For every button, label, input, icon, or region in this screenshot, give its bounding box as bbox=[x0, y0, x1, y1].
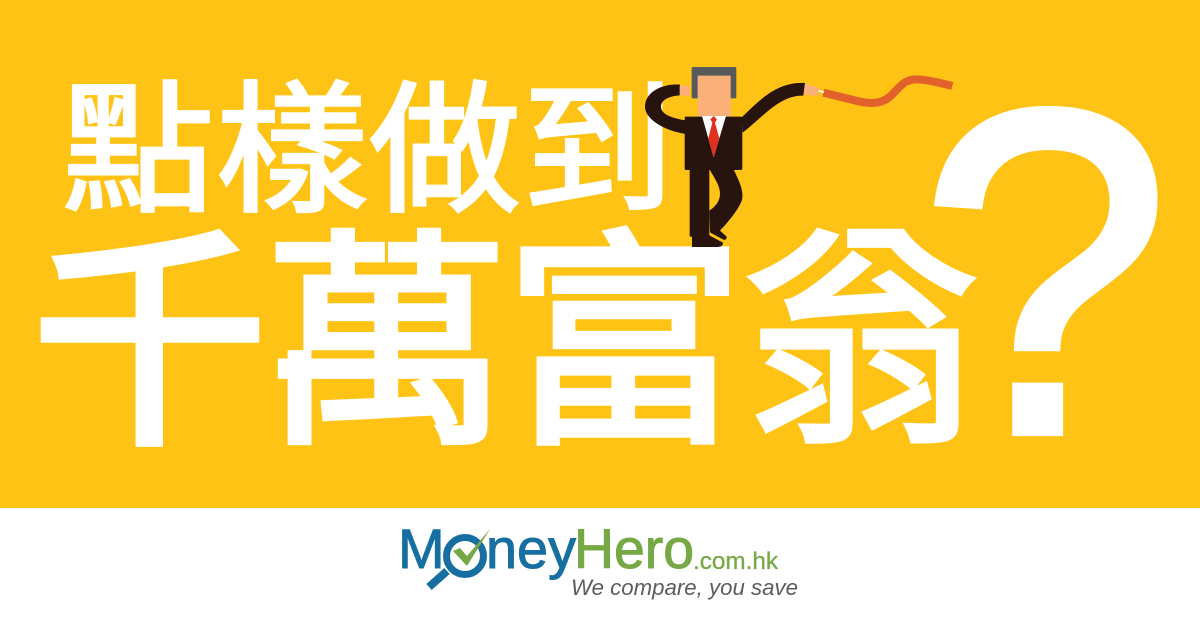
tie bbox=[708, 116, 719, 157]
bent leg bbox=[709, 170, 742, 240]
headline line 2 bbox=[33, 216, 979, 474]
magnifier icon bbox=[429, 529, 490, 587]
right hand bbox=[804, 84, 819, 96]
headline line 1 bbox=[62, 73, 674, 231]
headline line 2: 富 bbox=[504, 216, 745, 473]
headline line 1: 到 bbox=[522, 73, 674, 231]
headline line 2: 千 bbox=[33, 217, 267, 474]
headline line 2: 萬 bbox=[264, 217, 509, 473]
hair bbox=[692, 67, 736, 98]
jacket bbox=[685, 117, 742, 170]
headline line 1: 做 bbox=[369, 73, 521, 231]
headline line 1: 點 bbox=[62, 73, 214, 231]
right arm bbox=[742, 83, 805, 133]
illustration: businessman with whip bbox=[645, 67, 952, 247]
headline line 2: 翁 bbox=[743, 217, 979, 473]
standing leg bbox=[690, 169, 723, 247]
MoneyHero logo bbox=[398, 517, 798, 600]
question mark: ? bbox=[920, 15, 1170, 530]
logo word: ney: ney bbox=[486, 517, 576, 580]
shirt bbox=[702, 116, 726, 157]
left arm bbox=[645, 85, 687, 134]
logo word: .com.hk: .com.hk bbox=[693, 548, 779, 575]
tagline: We compare, you save bbox=[571, 575, 798, 600]
left hand bbox=[680, 86, 690, 96]
logo word: Hero: Hero bbox=[574, 517, 694, 580]
head bbox=[698, 76, 731, 117]
logo word: M: M bbox=[398, 517, 445, 580]
headline line 1: 樣 bbox=[216, 73, 368, 231]
whip bbox=[823, 79, 952, 103]
